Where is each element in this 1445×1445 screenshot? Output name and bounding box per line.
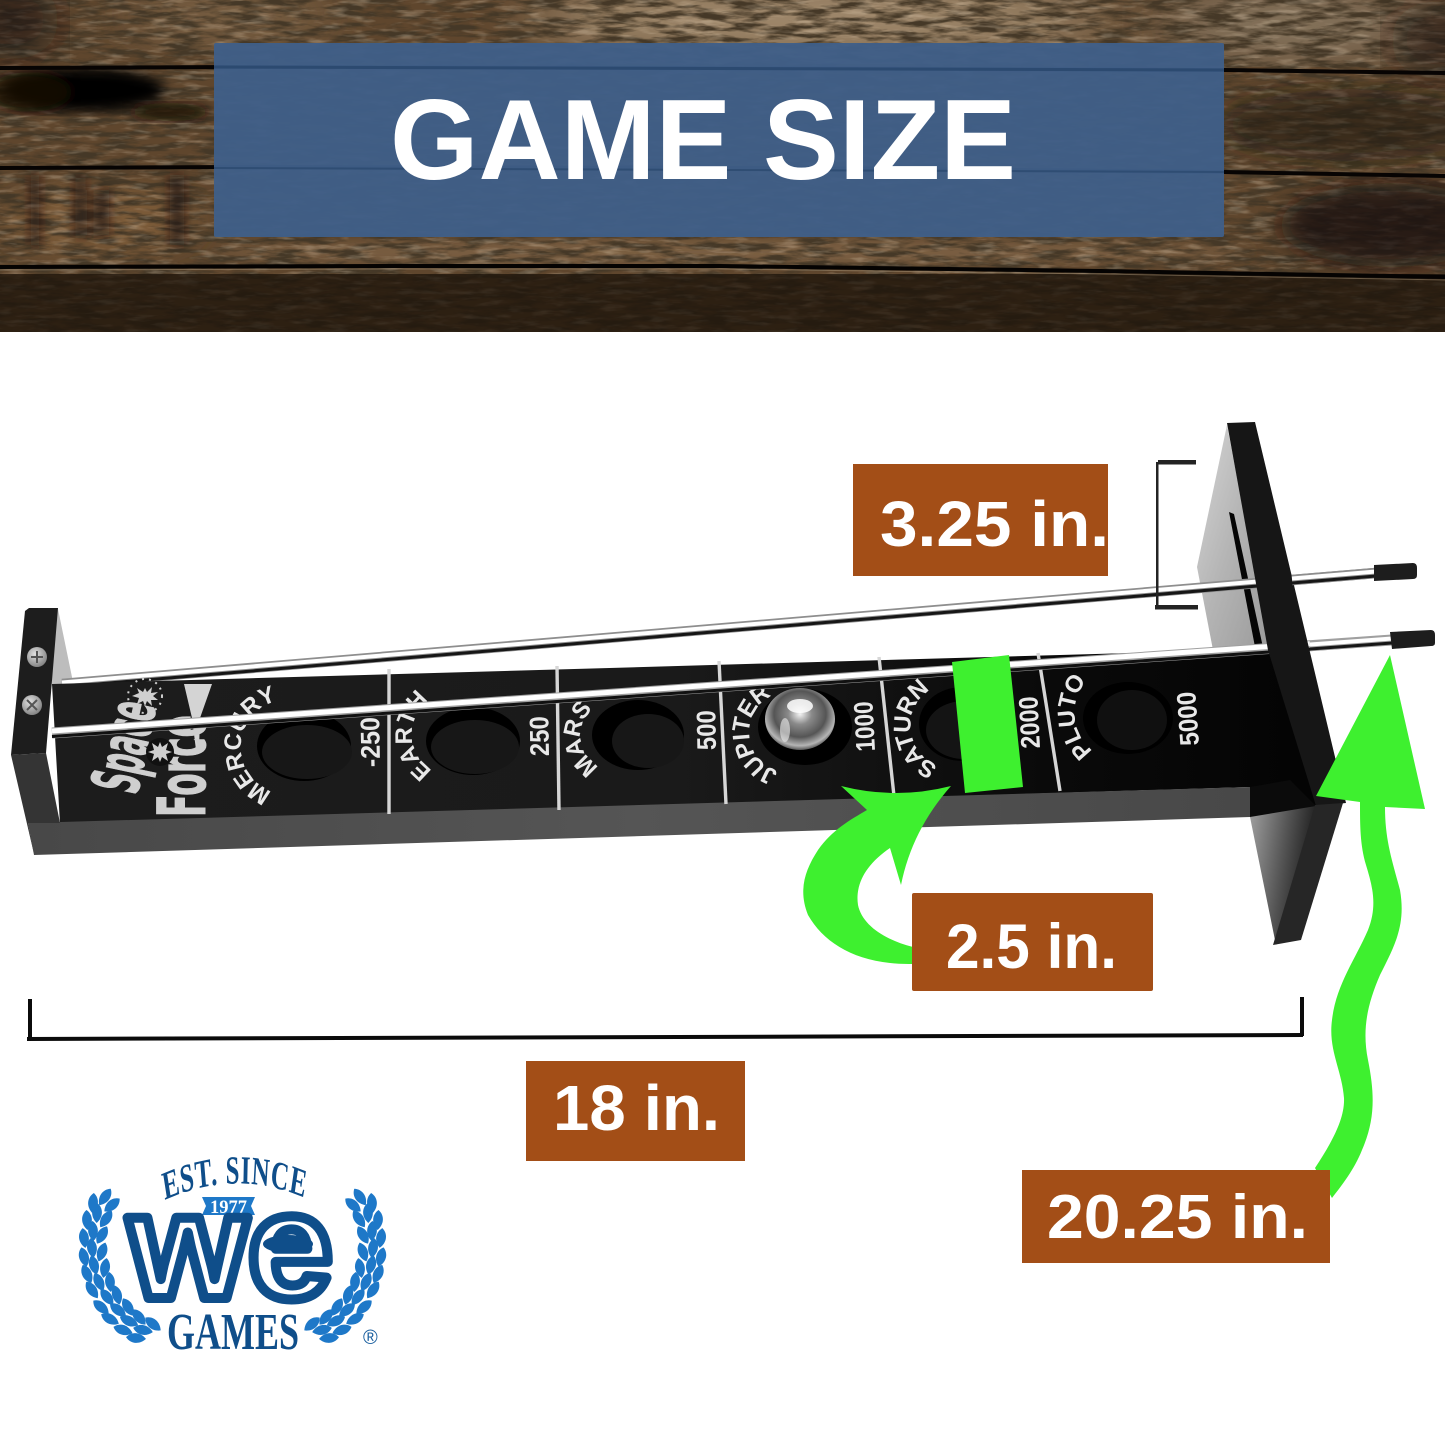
back rod outer section — [1292, 572, 1376, 583]
label: 2.5 in.: 2.5 in. — [946, 912, 1117, 982]
label pluto: PLUTO — [1058, 675, 1092, 761]
hole jupiter — [758, 689, 852, 765]
label: 20.25 in. — [1022, 1170, 1330, 1263]
game board product — [11, 422, 1435, 945]
label earth: EARTH — [395, 690, 431, 782]
label: 18 in.: 18 in. — [553, 1072, 720, 1144]
1977 ribbon: 1977 — [210, 1197, 247, 1218]
dark staining over the grain — [0, 68, 210, 121]
board front lip — [28, 787, 1250, 855]
front guide rod — [52, 638, 1392, 736]
right plate shoulder — [1250, 780, 1316, 830]
length bracket — [27, 997, 1303, 1040]
score -250: -250 — [355, 717, 386, 767]
hole pluto — [1083, 682, 1173, 754]
score 1000: 1000 — [848, 701, 881, 752]
registered mark: ® — [363, 1327, 378, 1349]
title banner — [214, 43, 1224, 237]
green marker covering the width — [952, 655, 1023, 793]
rod handle back — [1374, 563, 1417, 581]
space force logo: Force — [144, 715, 221, 817]
green curved arrow to 2.5 in label — [803, 786, 951, 964]
right end plate black edge — [1227, 422, 1346, 806]
right end plate slot — [1229, 512, 1264, 652]
label jupiter: JUPITER — [732, 689, 776, 784]
hole saturn — [919, 687, 1005, 761]
score 5000: 5000 — [1171, 691, 1205, 747]
hole mercury — [257, 711, 352, 781]
title: GAME SIZE — [390, 77, 1016, 204]
logo burst lower — [146, 738, 174, 766]
we wordmark: we — [127, 1161, 333, 1331]
left post lower side — [11, 753, 60, 854]
space force logo — [77, 679, 221, 817]
label: 18 in. — [526, 1061, 745, 1161]
score dividers — [389, 653, 1060, 814]
board playing surface — [52, 649, 1318, 824]
laurel left — [77, 1186, 164, 1344]
screw top — [27, 647, 47, 667]
green wavy arrow to 20.25 in label — [1315, 655, 1425, 1198]
score 2000: 2000 — [1013, 696, 1046, 749]
label: 3.25 in.: 3.25 in. — [880, 488, 1109, 560]
space force logo: Space — [77, 693, 172, 799]
right end plate inner face — [1197, 425, 1270, 650]
planet labels — [224, 675, 1092, 806]
logo rocket — [184, 684, 212, 750]
height bracket — [1155, 460, 1198, 610]
label: 20.25 in.: 20.25 in. — [1047, 1183, 1308, 1252]
score 250: 250 — [524, 716, 555, 756]
label mercury: MERCURY — [224, 685, 272, 806]
WE Games logo — [78, 1157, 386, 1361]
laurel right — [301, 1186, 388, 1344]
back guide rod — [62, 572, 1376, 687]
label: 2.5 in. — [912, 893, 1153, 991]
right foot end — [1273, 803, 1343, 945]
logo burst top — [128, 679, 162, 713]
left end post face — [11, 608, 58, 755]
steel ball — [765, 688, 835, 750]
label mars: MARS — [563, 702, 598, 778]
left end post inner face — [50, 609, 73, 686]
est since text: EST. SINCE — [161, 1157, 306, 1200]
wood plank header background — [0, 0, 1445, 354]
label: 3.25 in. — [853, 464, 1109, 576]
games text: GAMES — [167, 1304, 299, 1361]
rod handle front — [1390, 630, 1435, 649]
scoring holes — [257, 682, 1173, 781]
hole earth — [426, 707, 520, 775]
label saturn: SATURN — [894, 678, 936, 778]
score values — [355, 691, 1205, 767]
score 500: 500 — [691, 710, 722, 750]
screw bottom — [22, 695, 42, 715]
front rod outer section — [1310, 638, 1392, 649]
hole mars — [592, 700, 684, 770]
right foot light face — [1250, 806, 1316, 945]
